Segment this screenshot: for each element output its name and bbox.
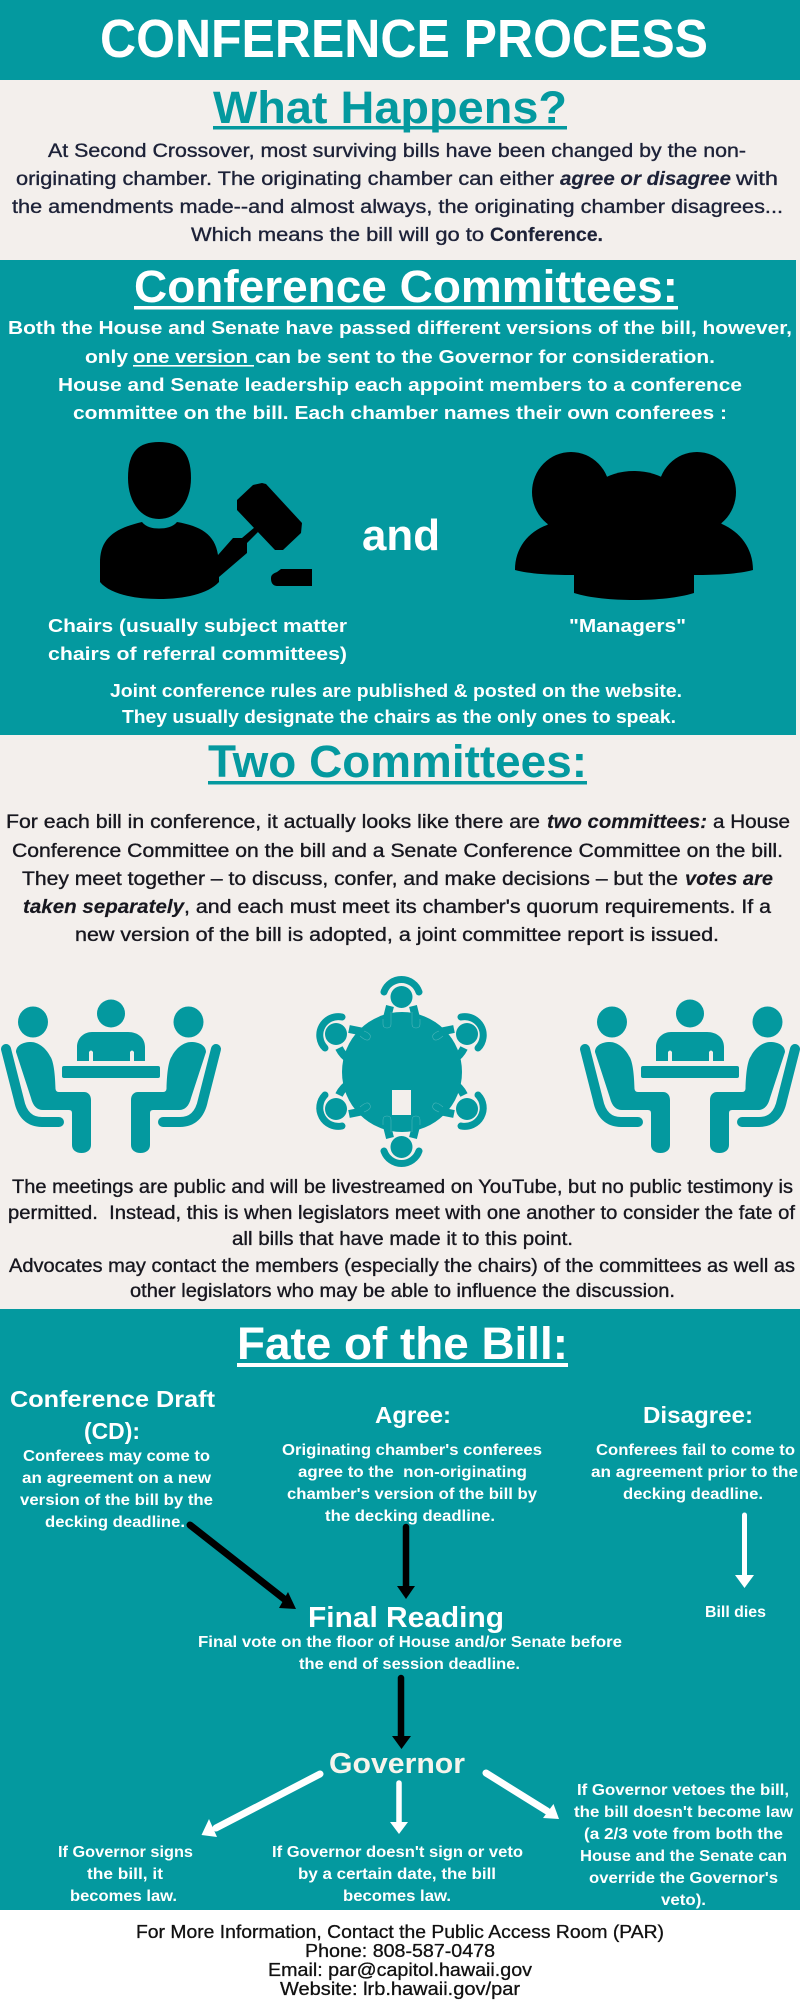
heading: conference committees: Conference Committees: xyxy=(134,261,678,312)
outcome: governor signs: If Governor signs xyxy=(58,1844,193,1861)
text block: second crossover explanation: with xyxy=(735,169,778,190)
arrow: governor to no action xyxy=(390,1783,408,1834)
column: disagree: Conferees fail to come to xyxy=(596,1442,795,1459)
column: agree xyxy=(282,1402,542,1525)
text: bill dies: Bill dies xyxy=(705,1604,766,1621)
column: agree: Originating chamber's conferees xyxy=(282,1442,542,1459)
heading: fate of the bill: Fate of the Bill: xyxy=(237,1318,568,1369)
text block: second crossover explanation: the amendments made--and almost always, the originating chamber disagrees... xyxy=(12,197,783,218)
outcome: governor vetoes: (a 2/3 vote from both the xyxy=(584,1826,783,1843)
icon: people at table, left xyxy=(6,1000,216,1153)
footer: contact information: For More Information, Contact the Public Access Room (PAR) xyxy=(136,1921,664,1942)
text: governor: Governor xyxy=(329,1748,465,1780)
outcome: no signature or veto xyxy=(272,1844,523,1905)
text block: two committees explanation: Conference Committee on the bill and a Senate Conference Committee on the bill. xyxy=(12,841,783,862)
text block: public meetings and advocates xyxy=(8,1177,796,1302)
text block: second crossover explanation: originating chamber. The originating chamber can either xyxy=(16,169,555,190)
column: disagree: decking deadline. xyxy=(623,1486,763,1503)
column: conference draft xyxy=(10,1386,215,1531)
column: conference draft: Conference Draft xyxy=(10,1386,215,1412)
icon: people at table, right xyxy=(585,1000,795,1153)
heading: two committees: Two Committees: xyxy=(208,736,587,787)
text block: conference committee description: can be sent to the Governor for consideration. xyxy=(255,346,715,367)
final reading: Final Reading xyxy=(308,1602,504,1634)
outcome: governor vetoes xyxy=(574,1782,794,1909)
text block: public meetings and advocates: all bills that have made it to this point. xyxy=(232,1229,573,1250)
text block: two committees explanation: two committees: xyxy=(547,812,707,833)
text block: second crossover explanation: Which means the bill will go to xyxy=(191,225,484,246)
text block: public meetings and advocates: other legislators who may be able to influence the discussion. xyxy=(130,1281,675,1302)
column: disagree: an agreement prior to the xyxy=(591,1464,798,1481)
icon: chair with gavel xyxy=(100,442,312,599)
text block: public meetings and advocates: Advocates may contact the members (especially the chairs) of the committees as well as xyxy=(9,1256,795,1277)
outcome: governor signs: the bill, it xyxy=(87,1866,164,1883)
title: CONFERENCE PROCESS xyxy=(100,9,708,69)
caption: chairs: Chairs (usually subject matter xyxy=(48,615,347,636)
column: agree: agree to the non-originating xyxy=(298,1464,527,1481)
panel: two committees xyxy=(0,735,800,1309)
text block: conference committee description: only xyxy=(85,346,129,367)
text block: two committees explanation: a House xyxy=(713,812,790,833)
footer: contact information: Phone: 808-587-0478 xyxy=(305,1940,495,1961)
arrow: agree to final reading xyxy=(397,1527,415,1599)
panel: conference committees xyxy=(0,260,796,735)
text block: public meetings and advocates: permitted. Instead, this is when legislators meet with one another to consider the fate of xyxy=(8,1203,796,1224)
text block: two committees explanation: new version of the bill is adopted, a joint committee report is issued. xyxy=(75,925,719,946)
column: disagree xyxy=(591,1402,798,1503)
column: agree: Agree: xyxy=(375,1402,451,1428)
text block: two committees explanation: votes are xyxy=(685,869,773,890)
text block: two committees explanation: taken separately xyxy=(23,897,186,918)
outcome: governor vetoes: the bill doesn't become law xyxy=(574,1804,794,1821)
outcome: no signature or veto: by a certain date, the bill xyxy=(298,1866,496,1883)
header banner xyxy=(0,0,800,80)
text block: conference committee description: Both the House and Senate have passed different versions of the bill, however, xyxy=(8,317,792,338)
column: conference draft: decking deadline. xyxy=(45,1514,185,1531)
arrow: governor to veto xyxy=(486,1773,559,1819)
outcome: governor vetoes: House and the Senate can xyxy=(580,1848,787,1865)
text block: two committees explanation xyxy=(6,812,790,946)
text: and: and xyxy=(362,511,440,560)
heading: what happens: What Happens? xyxy=(213,82,567,133)
text block: conference committee description: House and Senate leadership each appoint members to a conference xyxy=(58,374,742,395)
outcome: no signature or veto: If Governor doesn't sign or veto xyxy=(272,1844,523,1861)
final reading xyxy=(198,1602,622,1673)
text block: two committees explanation: , and each must meet its chamber's quorum requirements. If a xyxy=(184,897,771,918)
column: conference draft: (CD): xyxy=(84,1418,140,1444)
column: conference draft: Conferees may come to xyxy=(23,1448,210,1465)
panel: fate of the bill xyxy=(0,1309,800,1910)
outcome: no signature or veto: becomes law. xyxy=(343,1888,451,1905)
text block: joint conference rules: Joint conference rules are published & posted on the website. xyxy=(110,680,682,701)
text block: second crossover explanation: agree or disagree xyxy=(560,169,731,190)
text block: second crossover explanation xyxy=(12,141,783,246)
icon: managers group xyxy=(515,452,753,600)
text block: two committees explanation: For each bill in conference, it actually looks like there are xyxy=(6,812,540,833)
text block: second crossover explanation: Conference. xyxy=(490,225,603,246)
outcome: governor signs: becomes law. xyxy=(70,1888,177,1905)
text block: public meetings and advocates: The meetings are public and will be livestreamed on YouTube, but no public testimony is xyxy=(12,1177,793,1198)
column: agree: the decking deadline. xyxy=(325,1508,495,1525)
column: conference draft: version of the bill by the xyxy=(20,1492,213,1509)
arrow: conference draft to final reading xyxy=(190,1525,296,1609)
outcome: governor vetoes: veto). xyxy=(661,1892,706,1909)
text block: second crossover explanation: At Second Crossover, most surviving bills have been changed by the non- xyxy=(48,141,746,162)
outcome: governor vetoes: If Governor vetoes the bill, xyxy=(577,1782,789,1799)
icon: round conference table xyxy=(320,980,483,1164)
caption: chairs xyxy=(48,615,347,664)
arrow: disagree to bill dies xyxy=(735,1515,754,1588)
column: disagree: Disagree: xyxy=(643,1402,753,1428)
panel: what happens xyxy=(0,80,800,260)
arrow: final reading to governor xyxy=(392,1678,411,1749)
column: agree: chamber's version of the bill by xyxy=(287,1486,537,1503)
final reading: Final vote on the floor of House and/or Senate before xyxy=(198,1634,622,1651)
footer: contact information: Website: lrb.hawaii.gov/par xyxy=(280,1978,520,1999)
outcome: governor vetoes: override the Governor's xyxy=(589,1870,778,1887)
outcome: governor signs xyxy=(58,1844,193,1905)
footer: contact information xyxy=(0,1910,800,2000)
text block: conference committee description: committee on the bill. Each chamber names their own conferees : xyxy=(73,402,727,423)
text block: two committees explanation: They meet together – to discuss, confer, and make decisions – but the xyxy=(22,869,678,890)
caption: chairs: chairs of referral committees) xyxy=(48,643,347,664)
text block: conference committee description: one version xyxy=(133,346,248,367)
arrow: governor to signs xyxy=(202,1774,320,1837)
text block: conference committee description xyxy=(8,317,792,423)
column: conference draft: an agreement on a new xyxy=(22,1470,212,1487)
text block: joint conference rules: They usually designate the chairs as the only ones to speak. xyxy=(122,706,676,727)
text block: joint conference rules xyxy=(110,680,682,727)
caption: managers: "Managers" xyxy=(569,615,686,636)
footer: contact information: Email: par@capitol.hawaii.gov xyxy=(268,1959,533,1980)
final reading: the end of session deadline. xyxy=(299,1656,520,1673)
